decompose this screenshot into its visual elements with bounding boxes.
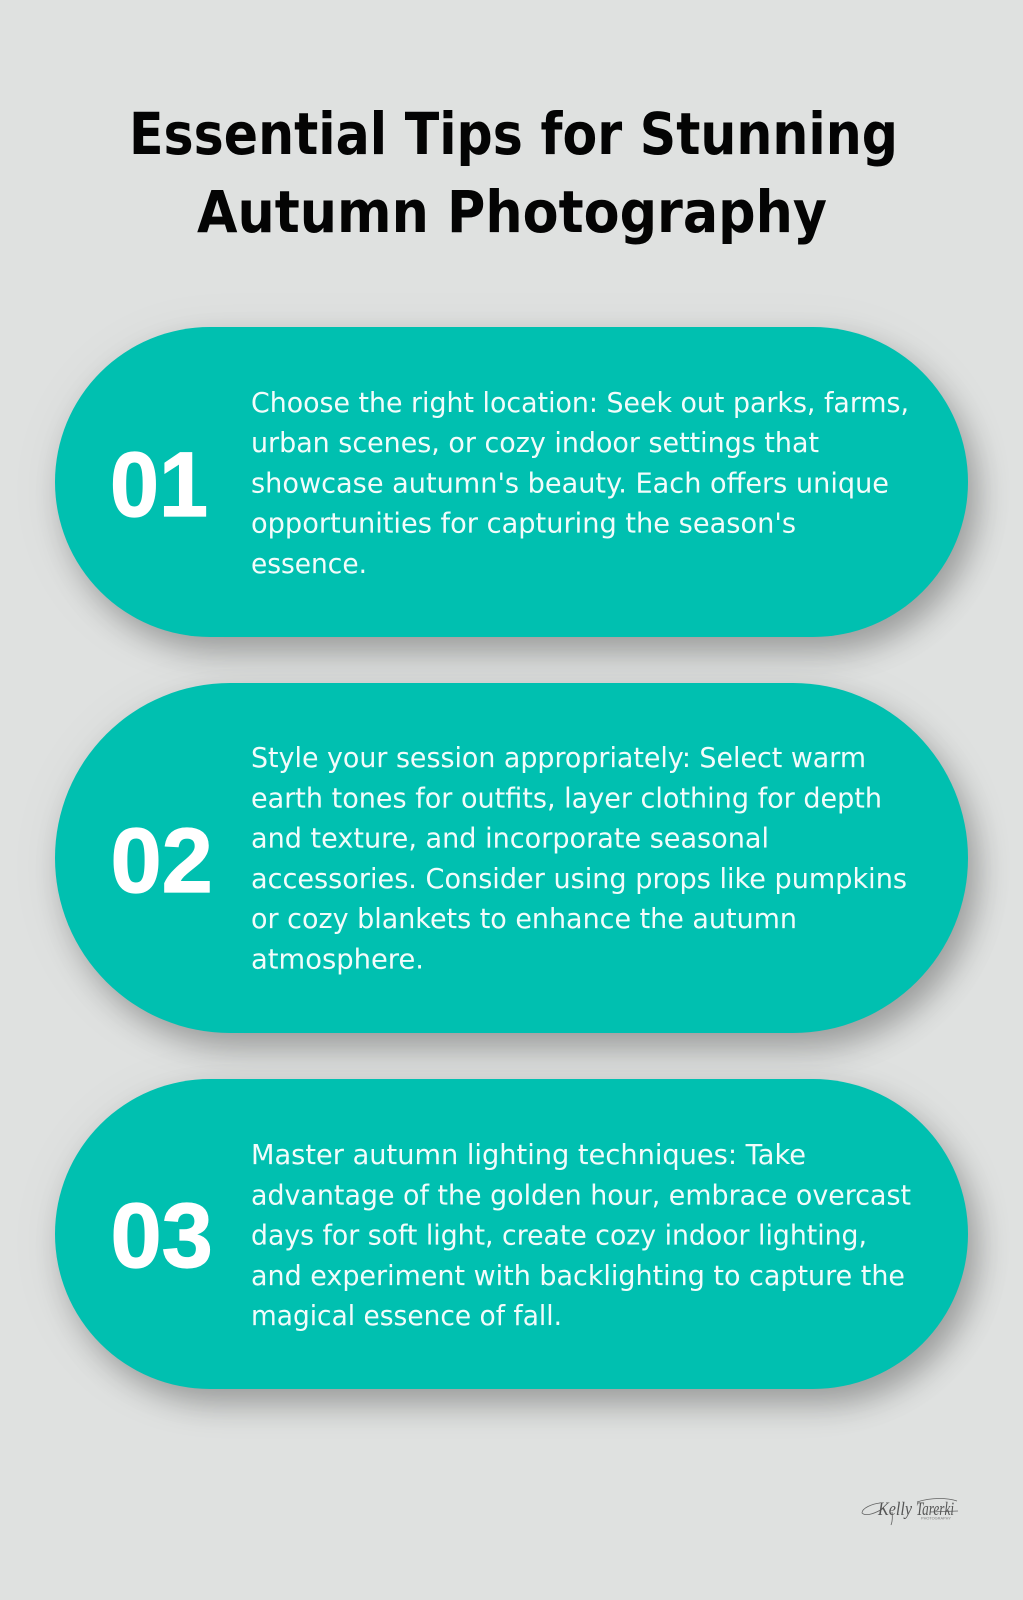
panel: tip 02 [55, 683, 978, 1048]
tip 03 text: advantage of the golden hour, embrace overcast [251, 1180, 911, 1212]
tip 02 text: earth tones for outfits, layer clothing for depth [251, 782, 882, 814]
logo: signature watermark [862, 1498, 958, 1525]
number 02: 02 [110, 810, 213, 912]
tip 02 text: atmosphere. [251, 944, 424, 976]
tip 03 text: Master autumn lighting techniques: Take [251, 1139, 806, 1171]
logo: signature watermark: Kelly [877, 1499, 912, 1520]
tip 02 text: and texture, and incorporate seasonal [251, 822, 769, 854]
title [129, 100, 898, 246]
tip 01 text: showcase autumn's beauty. Each offers unique [251, 468, 889, 500]
title: Essential Tips for Stunning [129, 100, 898, 168]
tip 02 text: or cozy blankets to enhance the autumn [251, 903, 797, 935]
logo: signature watermark: Tarerki [916, 1499, 954, 1520]
tip 02 text: accessories. Consider using props like pumpkins [251, 863, 907, 895]
tip 03 text [251, 1139, 911, 1332]
tip 03 text: and experiment with backlighting to capture the [251, 1260, 905, 1292]
tip 01 text: opportunities for capturing the season's [251, 508, 796, 540]
panel: tip 01 [55, 327, 978, 652]
title: Autumn Photography [197, 178, 827, 246]
tip 01 text: Choose the right location: Seek out parks, farms, [251, 387, 909, 419]
logo: signature watermark: PHOTOGRAPHY [921, 1516, 952, 1520]
tip 01 text: essence. [251, 548, 367, 580]
tip 02 text: Style your session appropriately: Select warm [251, 742, 866, 774]
tip 03 text: days for soft light, create cozy indoor lighting, [251, 1220, 867, 1252]
tip 01 text: urban scenes, or cozy indoor settings that [251, 427, 819, 459]
panel: tip 03 [55, 1079, 978, 1404]
number 03: 03 [110, 1185, 213, 1287]
tip 01 text [251, 387, 909, 580]
tip 02 text [251, 742, 907, 976]
number 01: 01 [110, 434, 208, 536]
tip 03 text: magical essence of fall. [251, 1300, 562, 1332]
